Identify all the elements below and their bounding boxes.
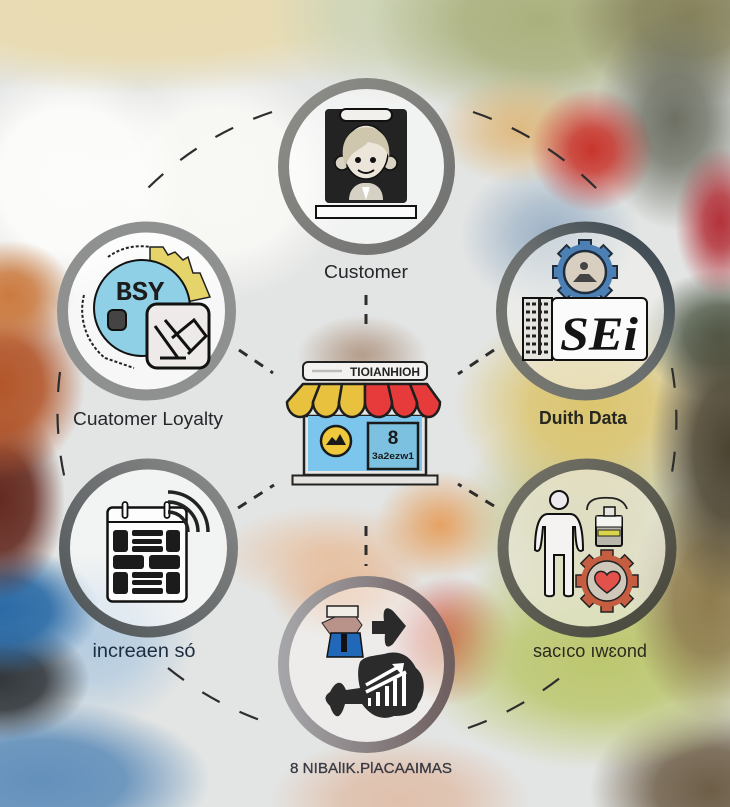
topic: Customer [284,84,450,282]
icon: loyalty badge [82,246,210,368]
dashed spokes from store to topics [238,295,494,566]
label: Customer Loyalty: Cuatomer Loyalty [73,409,223,429]
label: bottom programs: 8 NIBAlIK.PlACAAIMAS [290,760,452,777]
topic: Service [503,464,671,661]
store sign [303,362,427,380]
icon: gear and data card [523,240,647,361]
topic: Customer Loyalty [62,227,230,429]
store body [304,416,426,475]
awning [287,384,440,417]
store window: 3a2ezw1 [372,451,414,461]
store window: 8 [388,428,398,449]
label: Duth Data: Duith Data [539,408,628,428]
icon: bag, arrows and growth chart [322,606,424,718]
icon: customer card [316,109,416,218]
label: increaen so: increaen só [92,641,196,662]
topic: Increase [64,464,232,662]
store base [292,476,438,484]
dashed connecting ring [57,112,676,728]
centre: storefront icon [287,362,440,484]
topic: Duth Data [502,227,670,428]
badge lettering: BSY [116,279,165,309]
label: sacrco iwcond: sacıco ıwɛond [533,641,647,661]
store emblem [321,426,351,456]
topic: Bottom programs [284,582,452,777]
store sign: TIOIANHIOH [350,365,420,379]
label: Customer: Customer [324,262,408,282]
icon: calendar with signal [108,492,208,602]
store window [368,423,418,469]
card lettering: SEi [560,308,639,361]
icon: person, bottle and heart gear [535,491,638,612]
